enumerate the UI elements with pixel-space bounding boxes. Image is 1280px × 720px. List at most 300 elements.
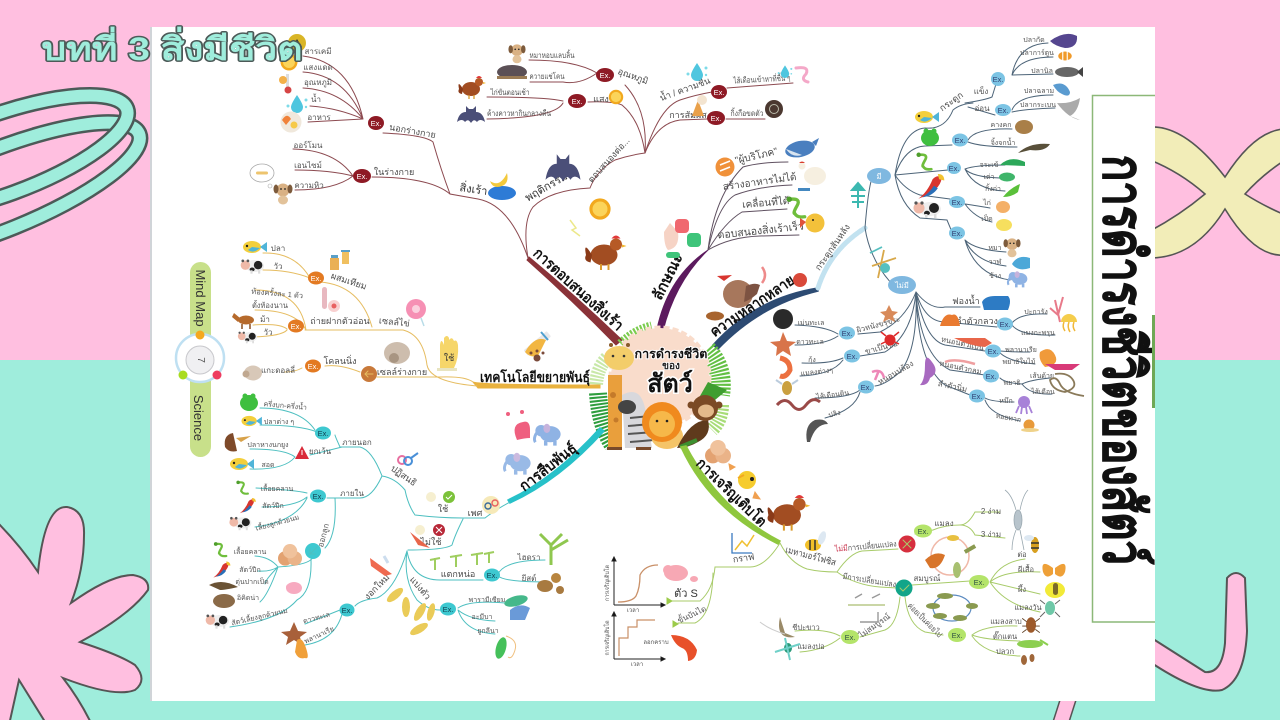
badges: Ex blue: Ex. [1000, 320, 1010, 329]
icon: touch hand [692, 95, 707, 116]
sub branch: metamorphosis: ตั๊กแตน [993, 631, 1017, 641]
badge: cross [898, 536, 916, 552]
sub branch: asexual: แบ่งตัว [408, 575, 433, 602]
badge: Ex embryo [288, 320, 304, 332]
sub branch: invertebrates right: พลานาเรีย [1005, 346, 1037, 354]
sub branches [251, 244, 477, 386]
node: no backbone [888, 276, 916, 294]
badges: Ex blue: Ex. [998, 106, 1008, 115]
panel: white mind map sheet [150, 27, 1155, 701]
sub branch: metamorphosis: ค่อยเป็นค่อยไป [906, 600, 945, 639]
icons: invertebrates left [770, 305, 899, 442]
icon: sex badge [482, 496, 500, 514]
icon: curled millipede [765, 100, 783, 118]
badges: Ex blue: Ex. [847, 352, 857, 361]
icon: bat [546, 154, 580, 181]
badges: Ex green: Ex. [918, 527, 928, 536]
sub branch: sexual: ปลาต่าง ๆ [264, 419, 294, 426]
sub branch: vertebrates: เป็ด [981, 214, 993, 223]
front fern [700, 382, 727, 400]
sub branches: ท้องครั้งละ 1 ตัว [251, 286, 304, 300]
lion [642, 402, 683, 449]
sub branch: metamorphosis: มีการเปลี่ยนแปลง [842, 570, 897, 589]
sub branch: external and internal stimuli: อุณหภูมิ [304, 78, 332, 88]
badges: Ex blue [839, 72, 1013, 402]
sub branch: vertebrates: ปลากระเบน [1020, 102, 1056, 109]
icon: thumbs hand with badges [664, 219, 701, 258]
background: mint bottom [0, 360, 1280, 720]
sub branch: invertebrates left: ปลิง [828, 409, 841, 420]
sub branch: vertebrates: ปลานิล [1031, 67, 1053, 75]
sub branch: asexual: พารามีเซียม [469, 596, 505, 604]
icon: sheep [242, 366, 262, 380]
icon: dragonfly life cycle [848, 594, 885, 622]
sub branch: vertebrates: วาฬ [989, 258, 1002, 266]
badges: Ex green: Ex. [952, 631, 962, 640]
sub branch: invertebrates right: หนอนตัวกลม [939, 359, 982, 376]
icon: syringe and paw [524, 331, 551, 362]
branch: response to stimulus [293, 47, 793, 345]
sub branch: asexual: ดาวทะเล [302, 612, 331, 625]
icon: graph pictogram [732, 533, 754, 553]
chart: stair growth [603, 612, 669, 668]
sub branch: invertebrates right: ไส้เดือน [1030, 387, 1055, 396]
sub branch: behaviour: อุณหภูมิ [616, 66, 650, 87]
sub branch: behaviour: กิ้งกือขดตัว [730, 107, 764, 118]
center text: ของ [662, 361, 680, 372]
sub branch: sexual: ตุ่นปากเป็ด [235, 577, 269, 586]
sub branch: asexual: ยีสต์ [521, 573, 536, 583]
icon: rooster [585, 236, 626, 270]
arrow badge: live birth [305, 543, 321, 559]
sub branch: metamorphosis: ชีปะขาว [792, 623, 820, 632]
arrow: stage arrows [729, 464, 760, 499]
main branch stroke [681, 446, 780, 544]
leaves behind center [596, 328, 722, 445]
sub branch: invertebrates right: ปะการัง [1024, 308, 1048, 316]
sub branch: asexual: แตกหน่อ [441, 569, 475, 579]
node: have backbone [867, 168, 891, 184]
giraffe [604, 343, 634, 450]
zebra [618, 392, 654, 450]
icon: small bat [457, 106, 485, 123]
sub branch: graph: กราฟ [732, 552, 755, 564]
branch: growth [667, 446, 1042, 656]
sub branch: behaviour: ไก่ขันตอนเช้า [490, 88, 530, 97]
sub branch: behaviour: น้ำ / ความชื้น [658, 74, 712, 103]
chart: S curve growth [603, 557, 665, 614]
widget: mind map pill: Science [191, 395, 206, 441]
sub branch: vertebrates: ช้าง [989, 272, 1001, 280]
badges: Ex blue: Ex. [949, 164, 959, 173]
icons: invertebrates right [920, 296, 1084, 432]
sub branches: เซลล์ไข่ [378, 314, 410, 329]
sub branch: invertebrates right: หอยทาก [995, 413, 1022, 424]
icon: pink egg cell [406, 299, 426, 326]
sub branch: behaviour [487, 49, 793, 258]
badge: Ex light: Ex. [572, 97, 582, 106]
sub branch: behaviour: ไส้เดือนเข้าหาที่ชื้น ๆ [732, 72, 791, 86]
sub branch: external and internal stimuli: สิ่งเร้า [458, 179, 489, 198]
branch: reproduction technology [251, 244, 600, 388]
icon: light sun [609, 90, 623, 104]
icon: whale [784, 138, 819, 160]
icon: puffer fish [800, 214, 824, 232]
sub branch: invertebrates left: หนอนปล้อง [876, 359, 915, 387]
sub branches: โคลนนิ่ง [323, 354, 357, 366]
node: no backbone: ไม่มี [894, 281, 909, 290]
center: topic with animals [596, 328, 727, 450]
badges: Ex blue: Ex. [972, 392, 982, 401]
branch: diversity: กระดูกสันหลัง [813, 222, 853, 273]
sub branch: invertebrates left: แมลงต่างๆ [800, 367, 834, 378]
sub branches: characteristic list [708, 144, 804, 250]
sub branch: sexual: เลื้อยคลาน [234, 545, 267, 556]
sub branch: sexual: สัตว์ปีก [262, 502, 284, 510]
decoration: teal hoops [0, 71, 154, 283]
sub branch: vertebrates: ปลาการ์ตูน [1020, 49, 1054, 57]
badges: Ex blue: Ex. [955, 136, 965, 145]
icon: hen stage [768, 495, 810, 531]
sub branch: asexual: ไม่ใช้ [420, 537, 441, 547]
icon: shrimp [671, 635, 697, 661]
sub branch: metamorphosis: ผึ้ง [1017, 584, 1026, 594]
sub branch: invertebrates left: ดาวทะเล [796, 339, 824, 346]
sub branch: sexual: ปลาหางนกยูง [247, 442, 289, 449]
widget: mind map pill: 7 [195, 357, 206, 363]
widget: mind map pill [176, 262, 224, 457]
badge: Ex temperature: Ex. [600, 71, 610, 80]
badges: Ex green: Ex. [974, 578, 984, 587]
sub branch: graph: ขั้นบันได [675, 602, 708, 625]
sub branches: แกะดอลลี่ [261, 364, 295, 375]
sub branches: ปลา [271, 244, 285, 253]
main heading: เทคโนโลยีขยายพันธุ์: เทคโนโลยีขยายพันธุ์ [480, 368, 590, 386]
badge: Ex touch: Ex. [711, 114, 721, 123]
main heading: การสืบพันธุ์: การสืบพันธุ์ [516, 439, 581, 496]
icon: sun over rooster [589, 198, 611, 220]
badge: Ex artificial [308, 272, 324, 284]
sub branch: vertebrates: ปลาฉลาม [1024, 88, 1054, 95]
icon: moon and cloud [488, 173, 516, 200]
icon: small rooster [458, 76, 486, 99]
decoration: pink piece bottom [1052, 700, 1076, 720]
icon: broken fish bone [870, 247, 896, 278]
icons: amphibians [921, 120, 1050, 153]
badge: Ex inner [353, 169, 371, 183]
sub branches: วัว [274, 262, 282, 271]
badges: Ex blue: Ex. [842, 329, 852, 338]
branch: diversity [707, 36, 1056, 424]
icon: water drop top [686, 63, 708, 81]
main heading: ความหลากหลาย: ความหลากหลาย [707, 272, 798, 341]
sub branch: invertebrates left: กุ้ง [808, 356, 816, 364]
sub branch: invertebrates left: ไส้เดือนดิน [815, 388, 850, 401]
icon: cockroach [1022, 617, 1040, 633]
badges: Ex blue: Ex. [986, 372, 996, 381]
sub branch: vertebrates: เต่า [984, 174, 995, 181]
icon: dog [274, 184, 292, 204]
sub branch: external and internal stimuli: ในร่างกาย [374, 167, 414, 177]
icon: chemical sign [288, 34, 306, 52]
main heading: ลักษณะ: ลักษณะ [649, 251, 687, 303]
sub branch: external and internal stimuli: ความหิว [294, 181, 324, 190]
icon: sex symbols [398, 453, 418, 465]
icon: egg stage [705, 440, 731, 463]
badges: Ex green [841, 524, 989, 644]
badges: Ex teal: Ex. [313, 492, 323, 501]
icon: mayfly [760, 617, 795, 637]
icon: fish bone [851, 183, 865, 208]
icon: cow [914, 201, 941, 218]
sub branch: external and internal stimuli: นอกร่างกาย [388, 122, 437, 140]
icon: orange equal badge [716, 158, 734, 176]
icon: large sheep [384, 342, 410, 364]
sub branch: vertebrates: แข็ง [974, 86, 988, 96]
icon: cow gold branch [241, 260, 264, 274]
sub branch: vertebrates: กระดูก [938, 90, 966, 114]
sub branch: external and internal stimuli: น้ำ [311, 93, 321, 104]
sub branch: sexual: ออกลูก [316, 522, 332, 548]
icon: test tube [322, 287, 340, 312]
sub branch: metamorphosis [780, 507, 1042, 656]
sub branch: asexual: พลานาเรีย [303, 625, 335, 646]
sub branches: ผสมเทียม [330, 271, 368, 292]
sub branch: invertebrates left: ขาเป็นข้อ [864, 338, 899, 356]
center text [635, 347, 707, 398]
badges: Ex teal [310, 426, 500, 616]
monkey [677, 395, 722, 448]
icon: grasshopper [1017, 640, 1048, 648]
icon: thermometer [279, 74, 292, 94]
sub branch: graph: ตัว S [674, 588, 698, 600]
sub branch: invertebrates left: เม่นทะเล [798, 320, 824, 327]
icon: not use sex cross [415, 524, 445, 536]
sub branch: sexual: ครึ่งบก-ครึ่งน้ำ [263, 397, 307, 412]
sub branch: sexual: ใช้ [438, 504, 448, 514]
icon: butterfly [1042, 564, 1066, 577]
decoration: pink tube bottom right [1150, 573, 1247, 691]
sub branch: metamorphosis: ไม่มีการเปลี่ยนแปลง [833, 537, 897, 554]
icons: teal branch animals [206, 394, 302, 629]
branch: characteristics [649, 144, 804, 331]
icon: buffalo [497, 65, 527, 79]
sub branch: vertebrates: หมา [988, 245, 1002, 252]
icon: horse [232, 313, 254, 329]
sub branches: เซลล์ร่างกาย [377, 366, 427, 377]
sub branches: characteristic list: เคลื่อนที่ได้ [742, 193, 790, 211]
sub branch: external and internal stimuli: ออร์โมน [294, 140, 323, 150]
sub branch: metamorphosis: แมลงวัน [1014, 603, 1042, 612]
heading: chapter title: บทที่ 3 สิ่งมีชีวิต [42, 26, 302, 67]
sub branch: vertebrates: จระเข้ [980, 161, 999, 169]
badge: check [896, 580, 912, 596]
sub branch: sexual: เลื้อยคลาน [261, 482, 294, 493]
badge: Ex embryo: Ex. [291, 322, 301, 331]
sub branch: metamorphosis: 2 ง่าม [981, 507, 1001, 516]
badges: Ex teal: Ex. [318, 429, 328, 438]
background: pink top [0, 0, 1280, 360]
icon: panting dog [508, 44, 526, 63]
sub branch: invertebrates right: เส้นด้าย [1030, 372, 1054, 380]
sub branches: characteristic list: สร้างอาหารไม่ได้ [722, 171, 797, 193]
badges: Ex teal: Ex. [342, 606, 352, 615]
sub branch: asexual [302, 519, 545, 646]
main heading: การเจริญเติบโต: การเจริญเติบโต [692, 454, 771, 530]
sub branches: ตั้งท้องนาน [252, 300, 288, 310]
sub branch: behaviour: พฤติกรรม [523, 171, 570, 204]
center text: สัตว์ [647, 369, 693, 398]
sub branch: invertebrates left: ผิวหนังขรุขระ [855, 314, 901, 335]
sub branch: invertebrates left [795, 292, 916, 420]
sub branch: sexual: สัตว์ปีก [239, 566, 261, 574]
badges: Ex blue: Ex. [861, 383, 871, 392]
sub branch: sexual: สอด [261, 462, 275, 469]
sub branch: asexual: งอกใหม่ [362, 572, 392, 602]
sub branch: invertebrates right: พยาธิใบไม้ [1003, 357, 1035, 366]
sub branch: invertebrates right: หนอนตัวแบน [940, 335, 985, 352]
badge: Ex light [568, 94, 586, 108]
icons: asexual animals [281, 532, 568, 660]
badge: Ex inner: Ex. [357, 172, 367, 181]
icon: thought bubble bone [250, 164, 274, 188]
sub branch: metamorphosis: 3 ง่าม [981, 530, 1001, 539]
badges: Ex blue: Ex. [952, 229, 962, 238]
main branch stroke [657, 250, 708, 331]
sub branch: invertebrates right: พยาธิ [1004, 379, 1020, 387]
main branch stroke [527, 257, 622, 345]
sub branch: sexual: สัตว์เลี้ยงลูกด้วยนม [230, 604, 288, 627]
badge: Ex artificial: Ex. [311, 274, 321, 283]
sub branch: metamorphosis: ผีเสื้อ [1017, 564, 1034, 574]
icons: diversity group [706, 267, 807, 320]
sub branch: vertebrates: จิ้งจกน้ำ [991, 136, 1015, 147]
main branch stroke [508, 428, 604, 503]
sub branch: vertebrates: ไก่ [982, 198, 991, 207]
sub branch: vertebrates: อ่อน [974, 104, 990, 113]
sub branch: metamorphosis: สมบูรณ์ [914, 573, 941, 584]
chart: stair growth: เวลา [631, 662, 643, 668]
icon: dragonfly [775, 638, 800, 660]
badges: Ex blue: Ex. [952, 198, 962, 207]
icon: chick stage [738, 471, 756, 489]
icon: green snake vertebrate [916, 153, 931, 169]
sub branch: invertebrates right [916, 292, 1055, 424]
sub branch: behaviour: หมาหอบแลบลิ้น [530, 49, 575, 60]
icons: fish row [915, 34, 1083, 123]
sub branch: sexual: ปฏิสนธิ [389, 463, 418, 488]
icon: butterfly life cycle [925, 535, 976, 578]
icon: water and worm [778, 65, 808, 82]
icons: hearts and elephants [504, 410, 561, 475]
sub branch: external and internal stimuli [293, 47, 528, 258]
sub branch: invertebrates right: หมึก [999, 396, 1013, 405]
peach disc [611, 328, 709, 426]
center text: การดำรงชีวิต [635, 347, 707, 361]
title panel: vertical title box: การดำรงชีวิตของสัตว์ [1092, 155, 1155, 565]
sub branch: sexual: ภายใน [340, 489, 364, 498]
icon: parrot [918, 174, 944, 199]
sub branch: sexual: อิคิดน่า [237, 594, 259, 602]
icon: pigs [663, 565, 698, 582]
sub branch: metamorphosis: แมลงสาบ [990, 617, 1022, 626]
sub branch: behaviour: แสง [593, 94, 609, 104]
main heading: การตอบสนองสิ่งเร้า: การตอบสนองสิ่งเร้า [530, 243, 628, 334]
icon: bee [805, 530, 828, 551]
sub branch: sexual: ภายนอก [342, 438, 372, 447]
sub branch: metamorphosis: ปลวก [996, 647, 1014, 656]
badge: Ex outer: Ex. [371, 119, 381, 128]
sub branch: behaviour: ค้างคาวหากินกลางคืน [487, 109, 551, 118]
badge: Ex water: Ex. [714, 88, 724, 97]
badge: Ex touch [707, 111, 725, 125]
badges: Ex green: Ex. [845, 633, 855, 642]
icon: silverfish [1005, 490, 1028, 550]
icon: fly [1040, 600, 1060, 617]
sub branches: characteristic list: "ผู้บริโภค" [734, 144, 779, 167]
icons: reptiles and birds [996, 159, 1030, 287]
arrow badge: somatic cell [361, 366, 377, 382]
sub branch: metamorphosis: ไม่สมบูรณ์ [856, 611, 893, 641]
chart: stair growth: ลอกคราบ [643, 639, 669, 646]
icon: goose and hen [798, 162, 826, 191]
sub branches: ม้า [260, 315, 270, 324]
decoration: pink flower bottom left [0, 507, 148, 720]
icon: warning triangle [295, 446, 309, 459]
sub branch: sexual: เพศ [468, 508, 483, 518]
sub branch: vertebrates [895, 36, 1056, 280]
badge: Ex clone: Ex. [308, 362, 318, 371]
sub branch: vertebrates: ปลากัด [1023, 36, 1045, 44]
sub branch: external and internal stimuli: สารเคมี [304, 47, 332, 56]
icon: semen vials [330, 250, 350, 270]
sub branch: invertebrates right: ลำตัวกลวง [956, 316, 998, 326]
icon: food plate [280, 112, 302, 132]
main branch stroke [713, 288, 818, 349]
icon: grasshopper life cycle [926, 593, 978, 621]
sub branches: วัว [264, 328, 272, 337]
sub branch: external and internal stimuli: อาหาร [307, 113, 331, 122]
icon: water drop [286, 95, 308, 113]
icon: fish gold branch [243, 241, 267, 253]
icon: sun [280, 54, 298, 70]
sub branch: behaviour: ตอบสนองต่อ... [586, 135, 632, 185]
sub branch: invertebrates right: ฟองน้ำ [952, 294, 980, 306]
sub branch: metamorphosis: แมลง [934, 519, 954, 528]
decoration: green bar [1152, 315, 1155, 408]
badges: Ex blue: Ex. [988, 347, 998, 356]
sub branch: metamorphosis: ต่อ [1017, 550, 1027, 559]
badge: Ex outer [368, 116, 384, 130]
sub branch: sexual [230, 397, 510, 627]
sub branch: asexual: ไฮดรา [517, 553, 540, 562]
sub branch: invertebrates right: แมงกะพรุน [1021, 330, 1055, 337]
sub branch: invertebrates right: ลำตัวนิ่ม [937, 377, 968, 394]
sub branches: characteristic list: ตอบสนองสิ่งเร้าเร็ว [717, 219, 804, 242]
icon: crowing marks [570, 220, 580, 236]
node: have backbone: มี [876, 172, 882, 181]
sub branch: behaviour: การสัมผัส [669, 110, 707, 120]
sub branch: external and internal stimuli: เอนไซม์ [294, 160, 322, 170]
sub branch: vertebrates: กิ้งก่า [985, 182, 1001, 193]
icon: cow embryo [238, 332, 257, 343]
sub branch: external and internal stimuli: แสงแดด [303, 63, 333, 72]
icon: termites [1021, 654, 1034, 665]
badge: Ex temperature [596, 68, 614, 82]
decoration: yellow cross right [1150, 127, 1280, 258]
chart: S curve growth: การเจริญเติบโต [603, 565, 611, 601]
icon: glove hand [437, 336, 458, 371]
